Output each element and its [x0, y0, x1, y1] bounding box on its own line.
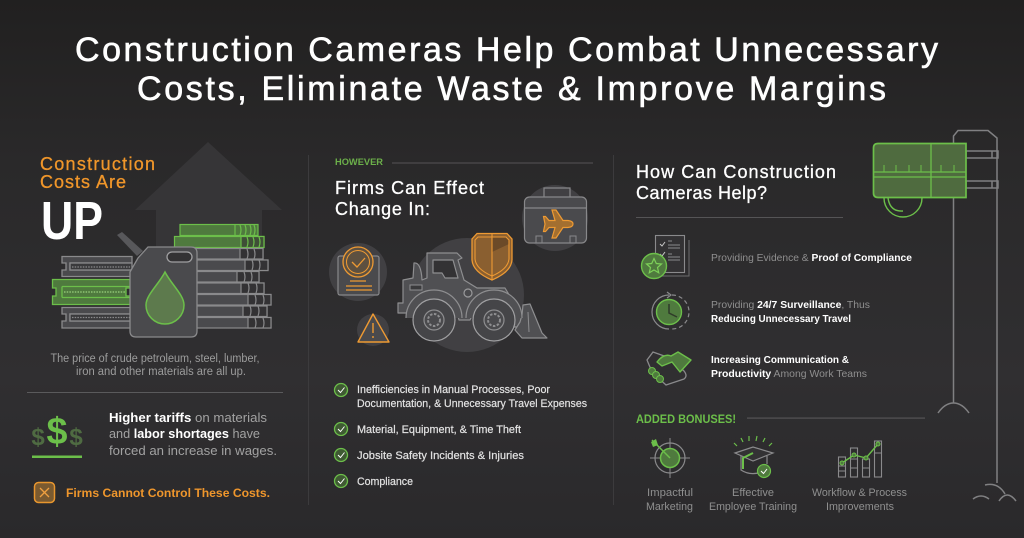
icon: warning triangle — [357, 314, 389, 346]
icon: up arrow house — [135, 142, 282, 262]
text: tariffs and wages: forced an increase in wages. — [109, 443, 277, 458]
text: price of materials: The price of crude petroleum, steel, lumber, — [50, 353, 260, 365]
icon: bar chart — [838, 441, 882, 477]
icon: clock surveillance — [652, 292, 689, 329]
icon: compliance checklist — [642, 236, 689, 278]
icon: graduation cap — [734, 436, 773, 478]
heading: up: UP — [41, 191, 103, 251]
text: tariffs and wages: Higher tariffs on materials — [109, 410, 268, 425]
text: communication: Productivity Among Work Teams — [711, 368, 867, 380]
icon: pole with camera — [874, 130, 1016, 501]
heading: how can construction cameras help: Cameras Help? — [636, 183, 767, 203]
text: surveillance: Reducing Unnecessary Travel — [711, 313, 851, 325]
text: bonus labels: Impactful — [647, 487, 693, 499]
title: Costs, Eliminate Waste & Improve Margins — [137, 70, 886, 108]
text: bonus labels: Marketing — [646, 501, 693, 513]
text: surveillance — [711, 299, 870, 325]
icon: fuel jug — [117, 232, 197, 337]
text: list items: Jobsite Safety Incidents & Injuries — [357, 450, 524, 462]
icon: handshake — [647, 352, 691, 385]
icon: dollar signs: $ — [69, 424, 83, 451]
heading: how can construction cameras help: How Can Construction — [636, 162, 836, 182]
heading: construction costs are: Costs Are — [40, 172, 126, 192]
icon: dollar signs: $ — [31, 424, 45, 451]
text: bonus labels: Workflow & Process — [812, 487, 908, 499]
icon: steel beams — [52, 256, 132, 328]
text: tariffs and wages — [109, 410, 277, 458]
icon: x box — [34, 482, 54, 502]
icon: loader — [398, 238, 547, 352]
list: areas of change — [334, 384, 587, 488]
text: list items: Documentation, & Unnecessary Travel Expenses — [357, 398, 587, 410]
text: communication — [711, 354, 867, 380]
heading: firms can effect change in: Change In: — [335, 199, 430, 219]
icon: dollar signs: $ — [46, 411, 68, 453]
icon: dollar signs — [31, 411, 83, 458]
icon: shield — [472, 233, 512, 280]
heading: firms can effect change in — [335, 178, 484, 219]
text: surveillance: Providing 24/7 Surveillance, Thus — [711, 299, 870, 311]
text: list items: Material, Equipment, & Time Theft — [357, 424, 521, 436]
label: however: HOWEVER — [335, 157, 383, 168]
text: bonus labels — [646, 487, 908, 513]
heading: construction costs are — [40, 154, 155, 192]
text: tariffs and wages: and labor shortages have — [109, 426, 260, 441]
heading: firms can effect change in: Firms Can Effect — [335, 178, 484, 198]
text: list items: Compliance — [357, 476, 413, 488]
text: bonus labels: Effective — [732, 487, 774, 499]
text: price of materials: iron and other materials are all up. — [76, 366, 246, 378]
icon: lumber stack — [174, 224, 271, 328]
text: list items — [357, 384, 587, 488]
text: evidence: Providing Evidence & Proof of Compliance — [711, 252, 912, 264]
text: bonus labels: Improvements — [826, 501, 895, 513]
text: bonus labels: Employee Training — [709, 501, 797, 513]
panel: how cameras help — [636, 162, 925, 513]
icon: document with check — [329, 243, 387, 301]
text: price of materials — [50, 353, 260, 378]
title: Construction Cameras Help Combat Unnecessary — [75, 31, 938, 69]
text: communication: Increasing Communication & — [711, 354, 849, 366]
icon: check bullets — [334, 384, 348, 488]
icon: briefcase with plane — [522, 185, 588, 251]
text: list items: Inefficiencies in Manual Processes, Poor — [357, 384, 550, 396]
icon: target — [650, 438, 690, 478]
heading: how can construction cameras help — [636, 162, 836, 203]
title — [75, 31, 938, 108]
heading: added bonuses: ADDED BONUSES! — [636, 414, 736, 426]
heading: construction costs are: Construction — [40, 154, 155, 174]
callout: cannot control: Firms Cannot Control These Costs. — [66, 488, 270, 500]
panel: firms can effect change — [329, 157, 593, 488]
panel: construction costs — [27, 142, 283, 502]
